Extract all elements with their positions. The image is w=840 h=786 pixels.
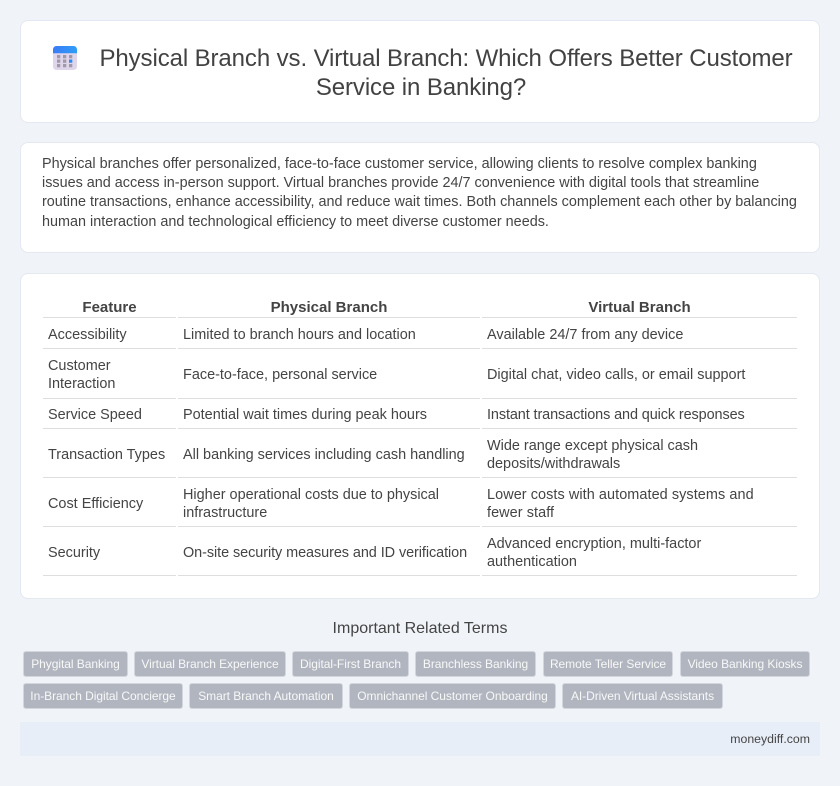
tag [543, 651, 673, 677]
icon: calendar [53, 46, 77, 70]
security: virtual: authentication [487, 554, 577, 570]
tag [292, 651, 409, 677]
security: physical: On-site security measures and ID verification [183, 545, 467, 561]
tag: Branchless Banking [423, 657, 528, 671]
tag: AI-Driven Virtual Assistants [571, 689, 714, 703]
customer interaction: physical: Face-to-face, personal service [183, 367, 377, 383]
tag [680, 651, 810, 677]
tag: Smart Branch Automation [198, 689, 334, 703]
comparison table panel [20, 273, 820, 599]
cost efficiency: virtual: fewer staff [487, 505, 554, 521]
tag: Remote Teller Service [550, 657, 666, 671]
intro panel [20, 142, 820, 253]
tag: Phygital Banking [31, 657, 120, 671]
row: service speed: Service Speed [48, 407, 142, 423]
intro text [42, 156, 797, 230]
transaction types: virtual: deposits/withdrawals [487, 456, 620, 472]
row: cost efficiency: Cost Efficiency [48, 496, 143, 512]
related terms tags [23, 651, 810, 709]
accessibility: physical: Limited to branch hours and location [183, 327, 416, 343]
table header: physical branch: Physical Branch [271, 299, 387, 316]
customer interaction: virtual: Digital chat, video calls, or email support [487, 367, 745, 383]
tag [23, 683, 183, 709]
cost efficiency: virtual: Lower costs with automated systems and [487, 487, 754, 503]
security: virtual: Advanced encryption, multi-factor [487, 536, 701, 552]
tag [189, 683, 343, 709]
row: accessibility: Accessibility [48, 327, 127, 343]
tag: Video Banking Kiosks [688, 657, 802, 671]
intro text: Physical branches offer personalized, face-to-face customer service, allowing clients to resolve complex banking [42, 156, 757, 172]
cost efficiency: physical: infrastructure [183, 505, 267, 521]
cost efficiency: physical: Higher operational costs due to physical [183, 487, 439, 503]
table header: feature: Feature [82, 299, 137, 316]
tag: Omnichannel Customer Onboarding [357, 689, 548, 703]
intro text: human interaction and technological efficiency to meet diverse customer needs. [42, 214, 549, 230]
row: customer interaction: Customer [48, 358, 111, 374]
cost efficiency: physical [183, 487, 439, 521]
intro text: issues and access in-person support. Virtual branches provide 24/7 convenience with digital tools that streamline [42, 175, 759, 191]
service speed: virtual: Instant transactions and quick responses [487, 407, 745, 423]
title [100, 45, 792, 101]
transaction types: virtual [487, 438, 698, 472]
tag: Digital-First Branch [300, 657, 401, 671]
tag [134, 651, 286, 677]
row: security: Security [48, 545, 100, 561]
tag [562, 683, 723, 709]
tag [23, 651, 128, 677]
transaction types: virtual: Wide range except physical cash [487, 438, 698, 454]
tag [415, 651, 536, 677]
title: Service in Banking? [316, 74, 526, 101]
security: virtual [487, 536, 702, 570]
intro text: routine transactions, enhance accessibility, and reduce wait times. Both channels complement each other by balancing [42, 194, 797, 210]
cost efficiency: virtual [487, 487, 754, 521]
tag: Virtual Branch Experience [141, 657, 279, 671]
row: customer interaction: Interaction [48, 376, 115, 392]
accessibility: virtual: Available 24/7 from any device [487, 327, 683, 343]
comparison table [43, 299, 797, 576]
tag: In-Branch Digital Concierge [30, 689, 176, 703]
related terms heading: Important Related Terms [333, 620, 507, 637]
row: transaction types: Transaction Types [48, 447, 165, 463]
title: Physical Branch vs. Virtual Branch: Which Offers Better Customer [100, 45, 792, 72]
service speed: physical: Potential wait times during peak hours [183, 407, 427, 423]
table header: virtual branch: Virtual Branch [588, 299, 691, 316]
tag [349, 683, 556, 709]
row: customer interaction [48, 358, 115, 392]
footer bar [20, 722, 820, 756]
transaction types: physical: All banking services including cash handling [183, 447, 465, 463]
header panel [20, 20, 820, 123]
footer source text: moneydiff.com [730, 732, 810, 746]
